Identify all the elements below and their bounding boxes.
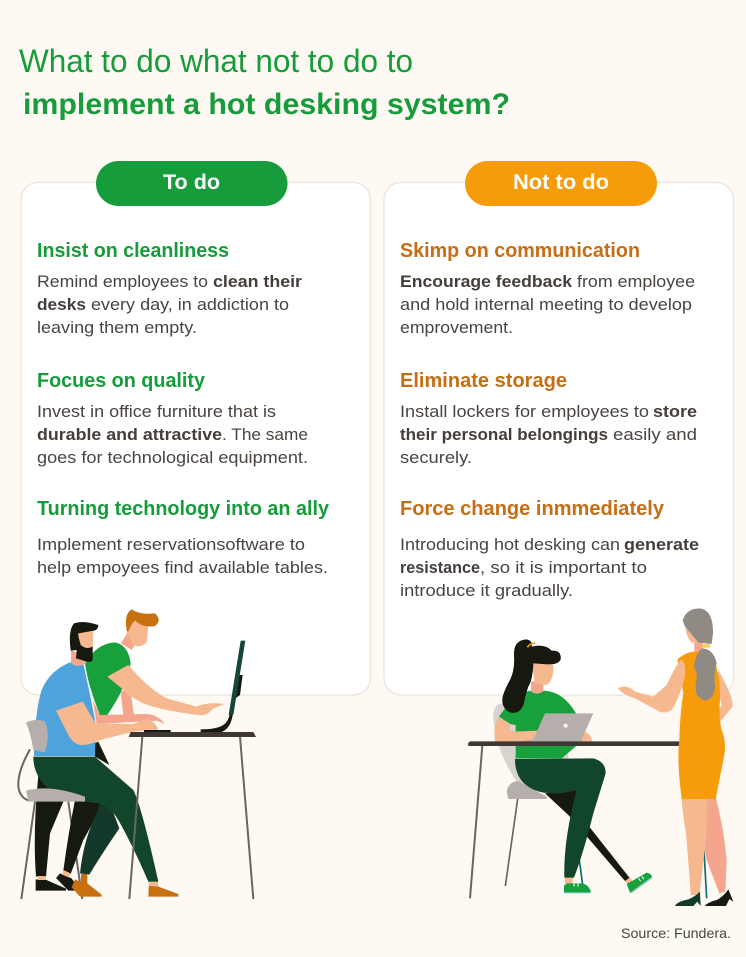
item: insist on cleanliness: every day, in addiction to	[91, 295, 289, 314]
pill: not to do: Not to do	[513, 171, 609, 194]
item: insist on cleanliness: leaving them empty.	[37, 318, 197, 337]
item: eliminate storage	[400, 370, 697, 467]
back man hand	[132, 724, 157, 731]
item: insist on cleanliness: Insist on cleanliness	[37, 240, 229, 262]
item: skimp on communication: Encourage feedback	[400, 272, 573, 291]
chair legs	[21, 802, 82, 899]
item: force change inmmediately: generate	[624, 535, 699, 554]
seated woman arms	[494, 717, 537, 741]
chair back	[26, 720, 48, 752]
teal chair leg	[579, 855, 583, 885]
keyboard	[144, 730, 171, 733]
front man neck	[71, 650, 85, 666]
standing woman rear leg	[702, 797, 727, 893]
back man legs	[35, 742, 109, 877]
item: insist on cleanliness	[37, 240, 302, 337]
orange dress	[677, 652, 725, 799]
item: skimp on communication	[400, 240, 695, 337]
pointing arm	[107, 665, 225, 715]
item: force change inmmediately: resistance	[400, 558, 480, 577]
item: skimp on communication: emprovement.	[400, 318, 513, 337]
monitor stand	[201, 700, 234, 732]
green shirt	[499, 691, 583, 758]
laptop logo	[564, 724, 568, 728]
item: turning technology into an ally	[37, 498, 330, 577]
item: turning technology into an ally: help empoyees find available tables.	[37, 558, 328, 577]
standing woman teal stool leg	[704, 850, 707, 898]
item: eliminate storage: store	[653, 402, 697, 421]
item: focues on quality: durable and attractive	[37, 425, 222, 444]
seated woman hair	[502, 639, 561, 713]
front man face	[74, 631, 93, 651]
pill: not to do	[465, 161, 657, 206]
sneakers	[564, 873, 652, 893]
item: insist on cleanliness: desks	[37, 295, 86, 314]
back man rear arm	[121, 688, 134, 715]
item: force change inmmediately: Introducing hot desking can	[400, 535, 620, 554]
ponytail	[694, 648, 717, 701]
item: skimp on communication: and hold internal meeting to develop	[400, 295, 692, 314]
chair back strut	[18, 749, 30, 801]
chair seat	[507, 781, 547, 799]
sneaker stripes	[574, 876, 644, 887]
laptop	[520, 713, 593, 741]
standing woman neck	[694, 638, 703, 653]
table leg	[470, 745, 482, 898]
front man far forearm	[93, 700, 165, 724]
item: skimp on communication: from employee	[577, 272, 695, 291]
item: force change inmmediately: Force change inmmediately	[400, 498, 665, 520]
chair leg	[505, 799, 518, 886]
item: insist on cleanliness: Remind employees to	[37, 272, 208, 291]
black leg	[545, 790, 630, 881]
item: focues on quality: Focues on quality	[37, 370, 206, 392]
item: force change inmmediately	[400, 498, 699, 600]
standing woman far arm	[714, 670, 733, 724]
table top	[468, 741, 680, 746]
title: What to do what not to do to	[19, 43, 413, 79]
green trousers	[515, 758, 606, 878]
table legs	[129, 737, 253, 899]
standing woman hair	[683, 608, 713, 644]
shoes	[72, 874, 102, 897]
item: eliminate storage: their personal belongings	[400, 425, 608, 444]
item: insist on cleanliness: clean their	[213, 272, 302, 291]
front arm	[56, 702, 158, 745]
pill: to do	[96, 161, 288, 206]
title: implement a hot desking system?	[23, 88, 510, 121]
monitor	[229, 641, 245, 715]
item: force change inmmediately: , so it is important to	[480, 558, 647, 577]
item: focues on quality: Invest in office furniture that is	[37, 402, 276, 421]
back man neck and head	[121, 632, 138, 650]
item: focues on quality: goes for technological equipment.	[37, 448, 308, 467]
ankles	[565, 877, 633, 885]
item: eliminate storage: Install lockers for employees to	[400, 402, 649, 421]
chair back	[493, 703, 568, 788]
green shirt	[85, 642, 131, 715]
hair tie	[527, 643, 535, 647]
panel: not to do	[384, 161, 734, 695]
blue shirt	[34, 662, 96, 756]
item: force change inmmediately: introduce it gradually.	[400, 581, 573, 600]
table top	[129, 732, 256, 737]
sneaker soles	[564, 877, 653, 893]
seated woman neck	[531, 680, 543, 694]
source note: Source: Fundera.	[621, 925, 731, 941]
front man trousers	[33, 757, 158, 882]
item: eliminate storage: Eliminate storage	[400, 370, 567, 392]
illustration: two women talking at a desk	[468, 608, 733, 906]
panel: to do	[21, 161, 370, 695]
item: eliminate storage: easily and	[613, 425, 697, 444]
face edge	[685, 627, 698, 643]
illustration: two men at a desk	[18, 609, 256, 899]
front man rear leg	[80, 803, 119, 875]
pill: to do: To do	[163, 171, 220, 194]
beard	[76, 635, 93, 662]
hair band	[702, 644, 710, 648]
chair seat	[26, 788, 85, 802]
item: skimp on communication: Skimp on communication	[400, 240, 640, 262]
item: turning technology into an ally: Implement reservationsoftware to	[37, 535, 305, 554]
item: turning technology into an ally: Turning technology into an ally	[37, 498, 330, 520]
title	[19, 43, 510, 121]
item: focues on quality	[37, 370, 308, 467]
back man shoes	[36, 873, 80, 891]
seated woman face	[532, 663, 553, 685]
item: focues on quality: . The same	[222, 425, 308, 444]
front man hair	[70, 622, 98, 651]
standing woman near arm	[618, 659, 685, 712]
heels	[675, 892, 701, 906]
standing woman front leg	[682, 797, 707, 895]
item: eliminate storage: securely.	[400, 448, 472, 467]
